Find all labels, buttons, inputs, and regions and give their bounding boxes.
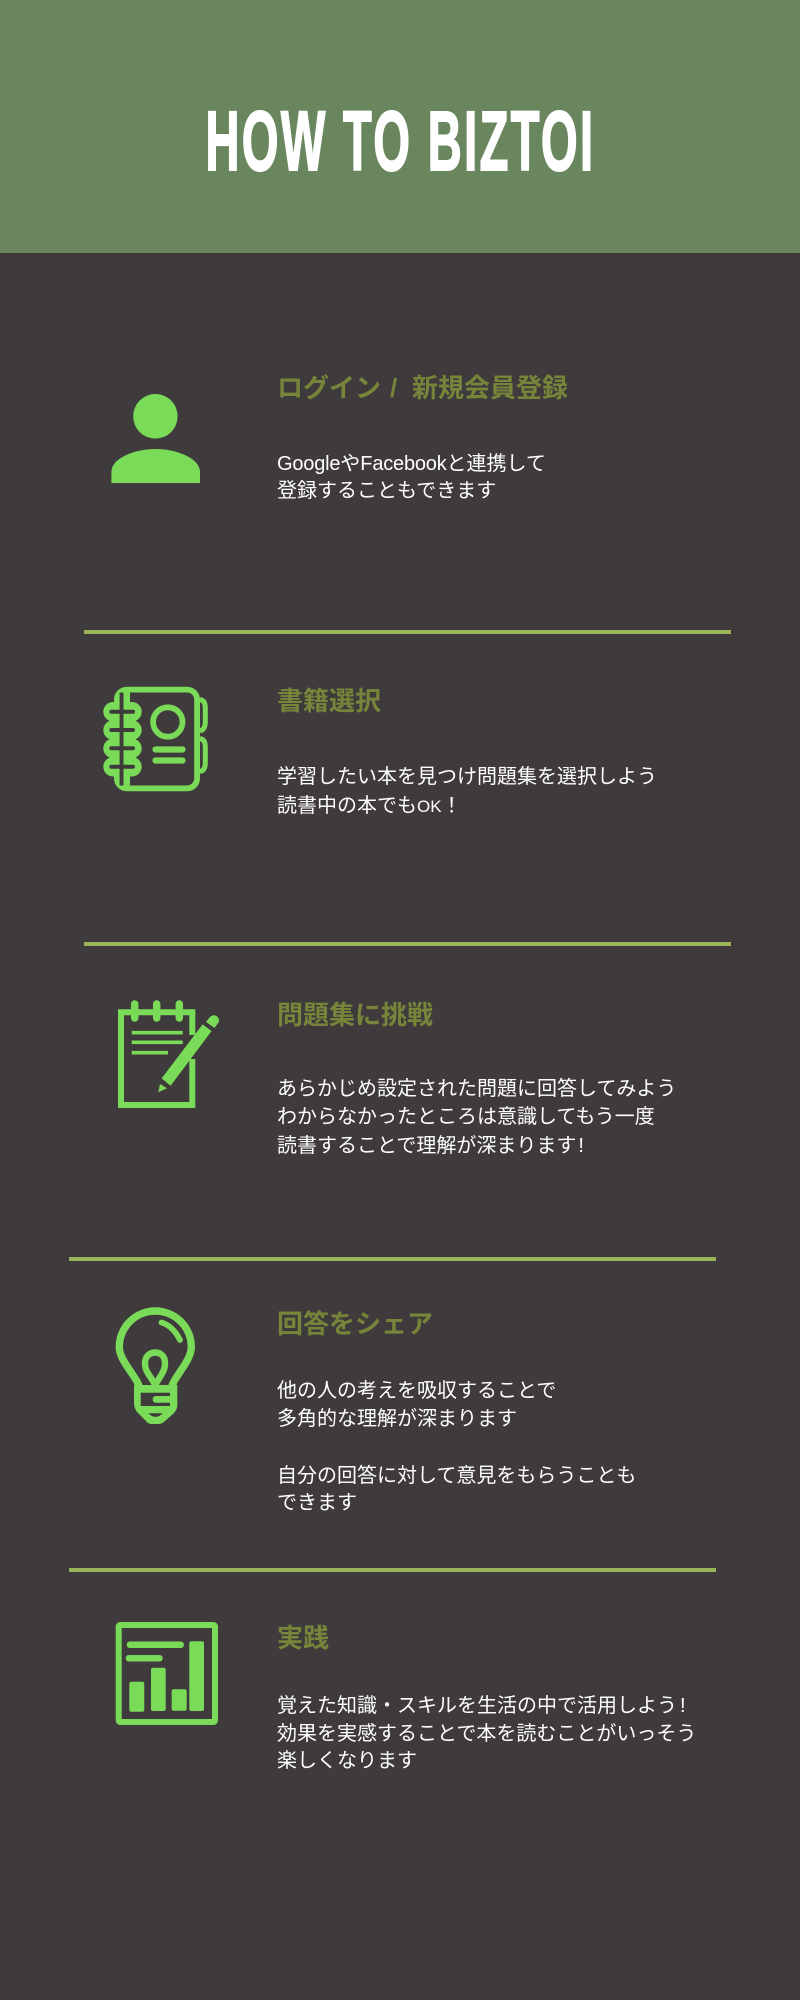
icon: notepad and pencil	[121, 1004, 219, 1105]
text: practice description: 覚えた知識・スキルを生活の中で活用しよう!	[277, 1694, 686, 1717]
heading: login: 新規会員登録	[412, 373, 568, 403]
text: share description	[277, 1379, 636, 1514]
header band	[0, 0, 800, 253]
text: questions description	[277, 1077, 676, 1157]
heading: try the questions: 問題集に挑戦	[277, 1000, 433, 1030]
icon: report chart	[119, 1625, 215, 1722]
text: questions description: あらかじめ設定された問題に回答してみよう	[277, 1077, 676, 1100]
text: book selection description: 学習したい本を見つけ問題集を選択しよう	[277, 765, 657, 788]
heading: book selection: 書籍選択	[277, 686, 381, 716]
text: login description: 登録することもできます	[277, 479, 496, 502]
text: login description: GoogleやFacebookと連携して	[277, 452, 546, 475]
text: questions description: わからなかったところは意識してもう一度	[277, 1105, 655, 1128]
heading: practice: 実践	[277, 1623, 329, 1653]
text: share description: 多角的な理解が深まります	[277, 1407, 517, 1430]
heading: share answers: 回答をシェア	[277, 1309, 433, 1339]
text: book selection description: 読書中の本でもOK！	[277, 794, 462, 817]
text: practice description	[277, 1694, 696, 1772]
icon: notebook	[103, 690, 205, 788]
icon: light bulb	[119, 1311, 191, 1424]
text: share description: 他の人の考えを吸収することで	[277, 1379, 556, 1402]
heading: login: ログイン	[277, 373, 381, 403]
text: questions description: 読書することで理解が深まります!	[277, 1134, 584, 1157]
text: practice description: 楽しくなります	[277, 1749, 417, 1772]
icon: person	[111, 394, 200, 483]
heading: login: /	[390, 373, 397, 403]
text: share description: 自分の回答に対して意見をもらうことも	[277, 1464, 636, 1487]
text: book selection description	[277, 765, 657, 817]
title: HOW TO BIZTOI	[206, 95, 593, 189]
text: login description	[277, 452, 546, 502]
text: practice description: 効果を実感することで本を読むことがいっそう	[277, 1722, 696, 1745]
text: share description: できます	[277, 1492, 357, 1514]
